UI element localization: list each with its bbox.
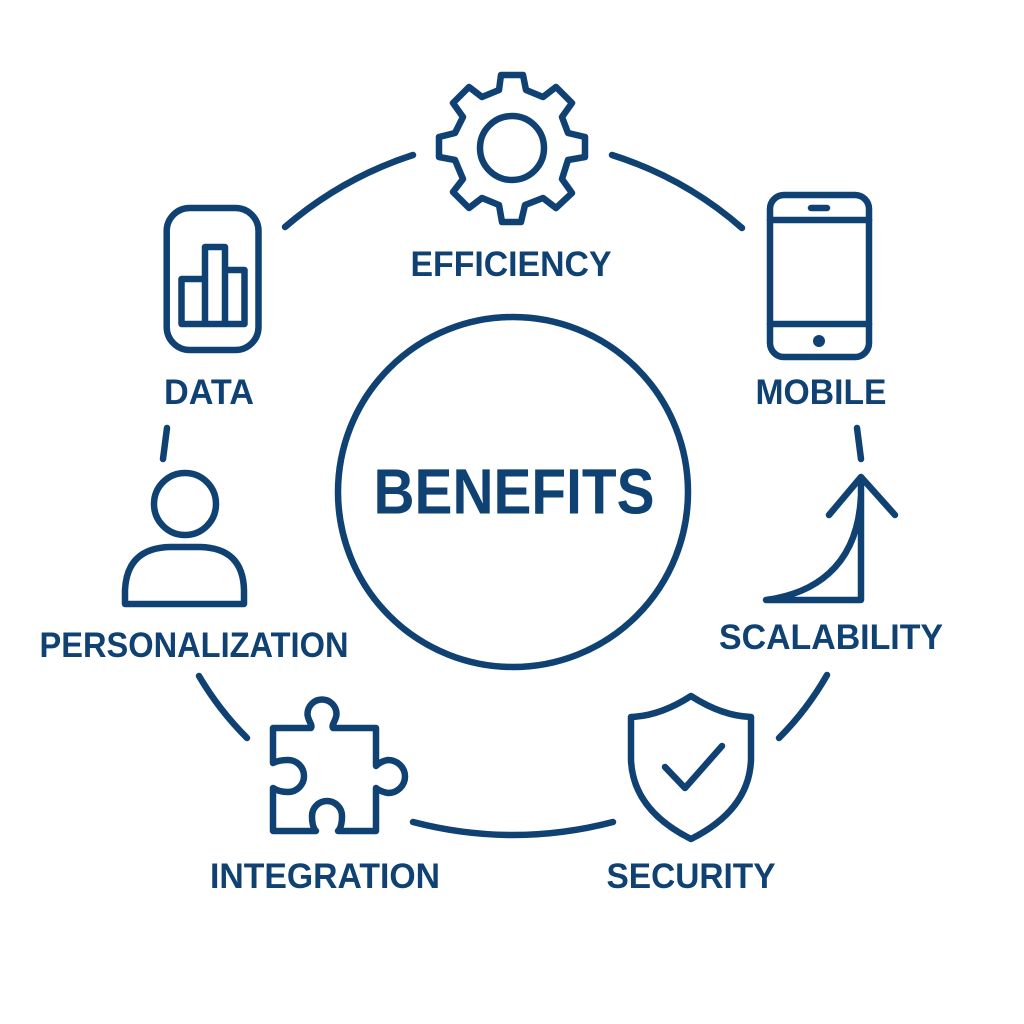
center circle with title — [338, 317, 688, 667]
icon: growth arrow — [766, 477, 895, 600]
icon: gear — [439, 75, 585, 222]
label: personalization: PERSONALIZATION — [40, 626, 348, 665]
icon: data chart on tablet — [167, 208, 258, 350]
label: scalability: SCALABILITY — [719, 618, 943, 657]
icon: mobile phone — [770, 195, 869, 357]
label: integration: INTEGRATION — [210, 857, 440, 896]
icon: person — [125, 473, 244, 604]
title: BENEFITS — [374, 456, 654, 528]
icon: puzzle piece — [273, 700, 405, 831]
label: data: DATA — [164, 373, 254, 412]
ring arcs — [163, 155, 861, 835]
icon: security shield — [631, 696, 751, 839]
label: mobile: MOBILE — [756, 373, 886, 412]
label: security: SECURITY — [606, 857, 776, 896]
label: efficiency: EFFICIENCY — [410, 245, 612, 284]
